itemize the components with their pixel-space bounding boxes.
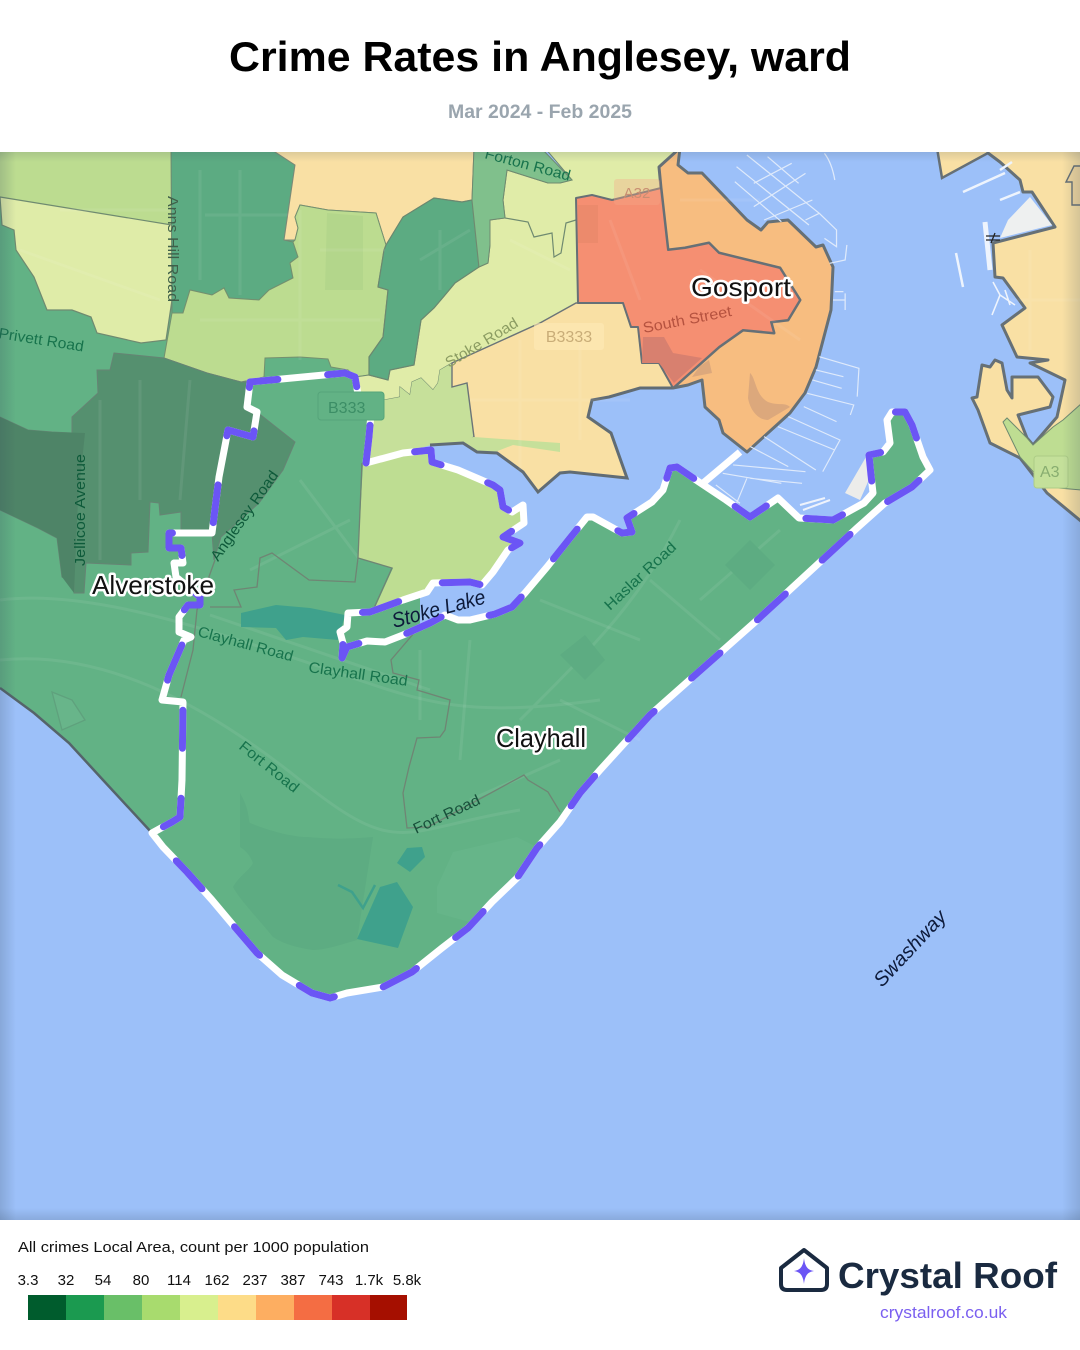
choropleth areas <box>0 148 1080 610</box>
road shield: A32 <box>614 179 660 205</box>
map edge shading <box>0 152 1080 1220</box>
stream <box>338 885 375 908</box>
legend tick labels: 114 <box>167 1272 191 1289</box>
area: Portsmouth tan <box>972 148 1080 522</box>
area: light green peninsula <box>358 450 524 610</box>
legend title: All crimes Local Area, count per 1000 population <box>18 1239 369 1256</box>
legend <box>18 1239 422 1320</box>
park: Gilkicker fields <box>233 793 373 950</box>
area: light green central <box>164 205 388 382</box>
legend tick labels: 5.8k <box>393 1272 422 1289</box>
ward area: Anglesey <box>152 373 930 998</box>
area: pale Stoke Road corridor <box>355 148 680 402</box>
park: Haslar block <box>572 644 594 668</box>
area: medium green Forton strip <box>472 148 572 267</box>
patch: darker orange shore <box>692 360 712 377</box>
area: tan top right <box>937 148 988 178</box>
label: Jellicoe Avenue: Jellicoe Avenue <box>72 454 89 566</box>
subtitle: date range: Mar 2024 - Feb 2025 <box>448 102 632 123</box>
legend colour scale <box>28 1295 407 1320</box>
strip: green along tan shore <box>431 437 560 452</box>
legend tick labels: 32 <box>58 1272 74 1289</box>
place label: Alverstoke: Alverstoke <box>92 570 214 600</box>
road shield: B3333 <box>534 323 604 350</box>
place label: Gosport: Gosport <box>691 272 792 302</box>
park: lighter housing east <box>437 837 537 923</box>
icon: house with star <box>781 1250 827 1290</box>
legend tick labels: 54 <box>95 1272 111 1289</box>
label: Haslar Road: Haslar Road <box>601 539 680 614</box>
legend tick labels: 387 <box>280 1272 306 1289</box>
area: tan north <box>269 148 474 245</box>
area: dark green Alverstoke <box>0 353 295 593</box>
pier: small marina <box>800 498 830 510</box>
area: top-left light green <box>0 148 172 225</box>
area: red Gosport centre <box>576 188 800 388</box>
label: Stoke Road: Stoke Road <box>442 315 521 371</box>
pier: Portsmouth <box>956 162 1020 315</box>
label: Clayhall Road west: Clayhall Road <box>196 623 295 665</box>
water background <box>0 152 1080 1220</box>
label: Fort Road east: Fort Road <box>411 792 483 838</box>
legend tick labels <box>18 1272 422 1289</box>
label: South Street: South Street <box>642 303 734 337</box>
pond: Gilkicker lagoon <box>357 882 413 948</box>
legend tick labels: 3.3 <box>18 1272 38 1289</box>
area: pale north-west <box>0 197 172 343</box>
road shield: B333 <box>318 392 384 420</box>
park: Haslar square <box>731 548 760 573</box>
area: tan B3333 <box>452 303 673 492</box>
area: mid green blob <box>369 198 479 380</box>
harbour marina south <box>716 357 859 503</box>
road shield: A3 <box>1034 456 1068 488</box>
patch: block in red area <box>578 205 598 243</box>
label: Anglesey Road: Anglesey Road <box>207 468 282 564</box>
legend tick labels: 162 <box>204 1272 230 1289</box>
road texture <box>0 170 1080 832</box>
darker park patches in ward <box>572 548 760 668</box>
road shield: A3: A3 <box>1040 464 1060 481</box>
boundary line north of town <box>505 218 576 257</box>
pond: Gilkicker small <box>397 847 425 872</box>
legend tick labels: 1.7k <box>355 1272 384 1289</box>
area: light green north of lake <box>366 363 474 463</box>
land: western base green <box>0 148 420 833</box>
road shield: B3333: B3333 <box>546 329 592 346</box>
patch inside central area <box>325 213 363 290</box>
place label: Clayhall: Clayhall <box>496 723 586 753</box>
water label: Swashway: Swashway <box>870 905 952 991</box>
pier: Haslar quay <box>845 457 871 500</box>
area: darker green far west <box>0 417 85 593</box>
area: orange Gosport east <box>659 148 833 452</box>
brand logo <box>781 1250 1058 1322</box>
legend tick labels: 80 <box>133 1272 149 1289</box>
harbour marina north <box>735 153 847 310</box>
water label: Stoke Lake: Stoke Lake <box>389 586 488 633</box>
legend tick labels: 237 <box>242 1272 268 1289</box>
legend tick labels: 743 <box>318 1272 344 1289</box>
patch: darker red <box>642 337 702 383</box>
tan coast stroke <box>430 388 673 492</box>
internal boundaries <box>52 463 560 828</box>
label: Clayhall Road east: Clayhall Road <box>307 659 409 690</box>
brand url: crystalroof.co.uk <box>880 1303 1008 1322</box>
brand name: Crystal Roof <box>838 1255 1058 1296</box>
map panel <box>0 145 1080 1220</box>
road shield: B333: B333 <box>328 400 365 417</box>
label: Anns Hill Road: Anns Hill Road <box>164 196 181 302</box>
label: Fort Road west: Fort Road <box>235 738 302 796</box>
coast line west <box>0 688 152 833</box>
icon: railway station <box>986 233 1000 243</box>
pond: Stoke lake west <box>241 605 345 640</box>
area: mid green north <box>171 148 298 313</box>
ward boundary: white line with purple dashes <box>152 373 930 998</box>
area: Portsmouth green <box>1003 403 1080 490</box>
road shield: A32: A32 <box>624 185 650 202</box>
title: Crime Rates in Anglesey, ward <box>229 33 851 80</box>
top right building <box>1066 166 1080 205</box>
patch: darker orange park <box>748 373 790 420</box>
road labels <box>0 145 734 838</box>
harbour station apron <box>1000 197 1052 238</box>
pier: causeway <box>702 452 740 484</box>
label: Forton Road: Forton Road <box>483 145 572 185</box>
